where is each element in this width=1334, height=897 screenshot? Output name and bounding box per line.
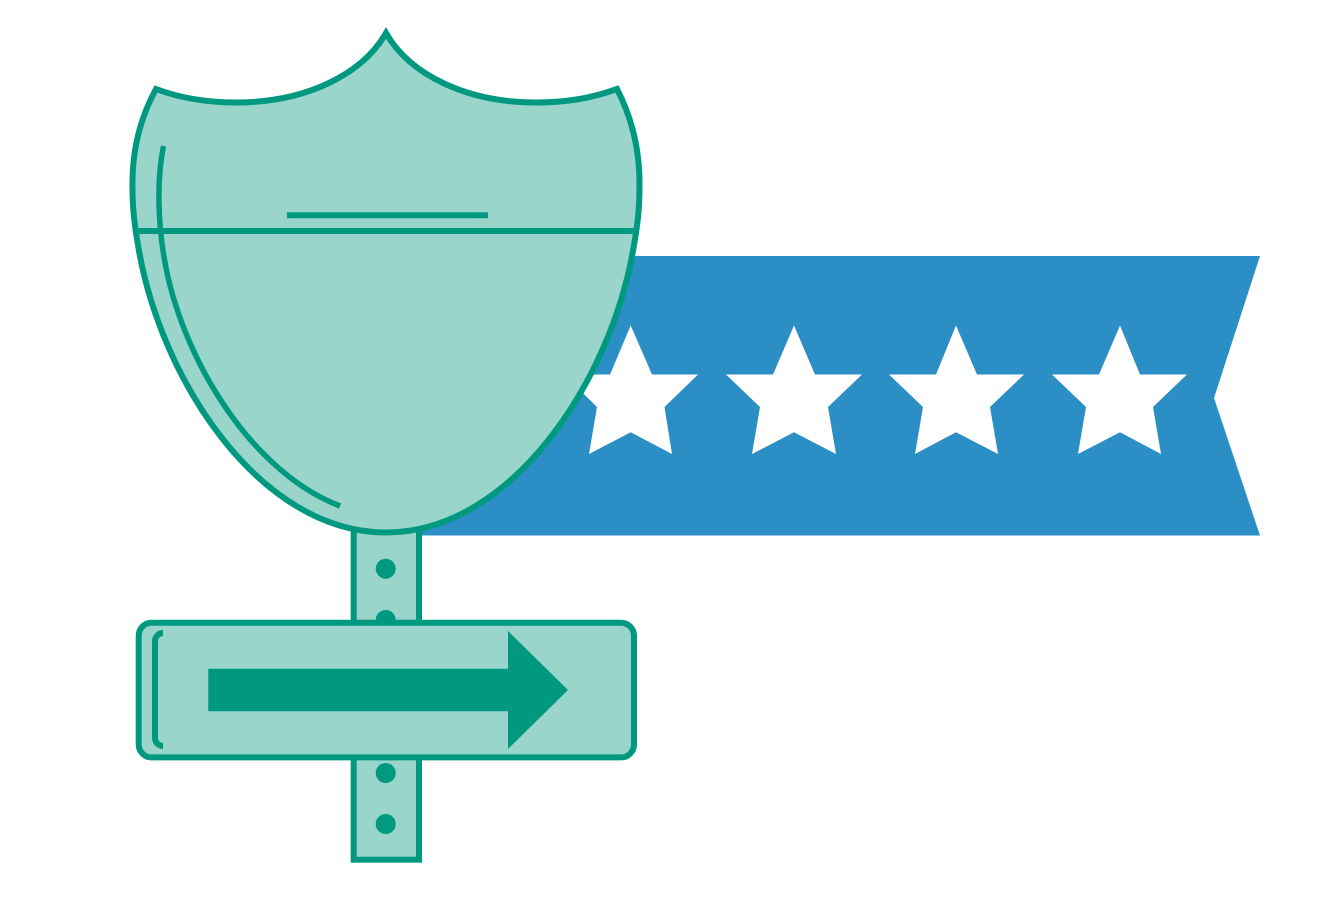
star 3	[889, 326, 1024, 454]
shield sign	[132, 33, 640, 532]
arrow sign	[139, 623, 634, 757]
sign post with bolts	[354, 500, 419, 860]
icon: arrow	[208, 631, 568, 749]
banner: blue ribbon with stars	[420, 256, 1260, 536]
star 1	[564, 326, 698, 454]
star 2	[726, 326, 862, 454]
star 4	[1052, 326, 1187, 454]
